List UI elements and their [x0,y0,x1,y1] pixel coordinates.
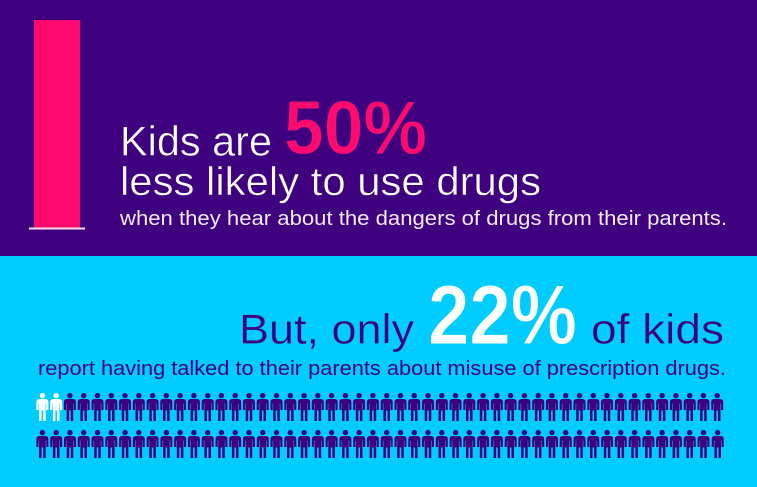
heading: kids are 50% [120,86,427,171]
heading: but only 22% of kids: of kids [591,306,724,352]
text: report having talked: report having talked to their parents about misuse of prescription drugs. [38,357,726,380]
heading: but only 22% of kids: 22% [428,268,577,362]
heading: kids are 50%: 50% [284,86,427,171]
heading: but only 22% of kids [239,268,724,362]
heading: but only 22% of kids: But, only [239,306,414,352]
bar: 50 percent [29,20,85,230]
panel: top purple [0,0,757,256]
text: when they hear: when they hear about the dangers of drugs from their parents. [119,208,727,230]
text: less likely: less likely to use drugs [120,160,541,204]
pictogram row 2 [36,430,724,458]
pictogram row 1 [36,393,723,421]
heading: kids are 50%: Kids are [120,118,272,164]
panel: bottom blue [0,256,757,487]
